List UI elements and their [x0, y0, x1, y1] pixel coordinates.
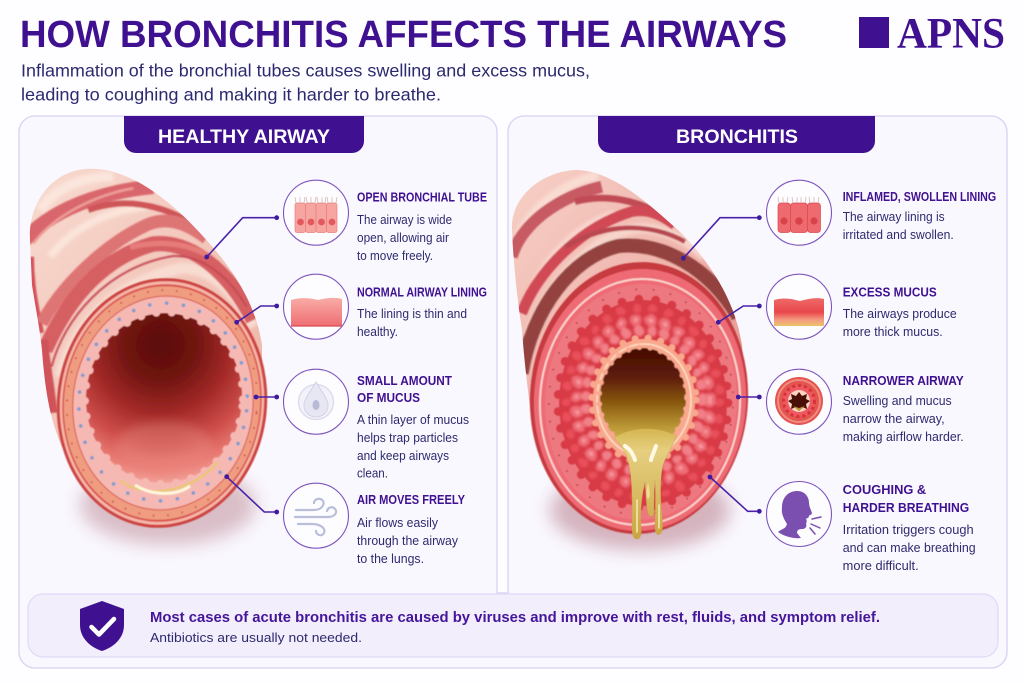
illustration: inflamed airway tube [505, 160, 765, 550]
item: open bronchial tube [284, 180, 487, 263]
text: coughing and harder breathing: and can make breathing [843, 541, 976, 555]
text: callout message: Antibiotics are usually not needed. [150, 630, 362, 645]
icon: swollen cells [766, 180, 832, 245]
connector lines: healthy airway [204, 215, 279, 514]
text: air moves freely: through the airway [357, 534, 459, 548]
heading tab: bronchitis [598, 116, 875, 153]
mucus drip [614, 429, 676, 539]
text: open bronchial tube: open, allowing air [357, 231, 449, 245]
text: excess mucus: more thick mucus. [843, 325, 943, 339]
text: inflamed, swollen lining: The airway lining is [843, 210, 945, 224]
icon: thick lining with mucus [766, 274, 832, 339]
text: coughing and harder breathing: COUGHING & [843, 482, 926, 497]
text: open bronchial tube: The airway is wide [357, 213, 452, 227]
text: open bronchial tube: OPEN BRONCHIAL TUBE [357, 190, 487, 204]
text: narrower airway: making airflow harder. [843, 430, 964, 444]
item: inflamed, swollen lining [766, 180, 996, 245]
text: inflamed, swollen lining [843, 189, 996, 242]
outer frame and panels [19, 116, 1007, 668]
item: air moves freely [284, 483, 465, 566]
heading tab: healthy airway: HEALTHY AIRWAY [158, 127, 330, 148]
text: coughing and harder breathing: Irritation triggers cough [843, 523, 974, 537]
front face of healthy tube [45, 268, 279, 538]
text: air moves freely: AIR MOVES FREELY [357, 492, 465, 507]
text: normal airway lining [357, 284, 487, 339]
text: small amount of mucus: helps trap particles [357, 431, 458, 445]
text: inflamed, swollen lining: INFLAMED, SWOLLEN LINING [843, 189, 996, 204]
text: narrower airway: NARROWER AIRWAY [843, 373, 964, 388]
icon: lining tissue [284, 274, 348, 339]
item: excess mucus [766, 274, 957, 339]
icon: wind [284, 483, 348, 548]
panel: bronchitis [505, 116, 996, 573]
text: small amount of mucus: clean. [357, 466, 388, 480]
connector lines: bronchitis [681, 215, 762, 514]
logo: APNS: APNS [897, 10, 1005, 58]
text: small amount of mucus: SMALL AMOUNT [357, 373, 452, 388]
icon: shield with check [80, 601, 124, 651]
text: open bronchial tube [357, 190, 487, 263]
text: callout message [150, 609, 880, 645]
text: normal airway lining: healthy. [357, 325, 398, 339]
text: narrower airway [843, 373, 964, 444]
text: coughing and harder breathing: more difficult. [843, 559, 919, 573]
text: air moves freely [357, 492, 465, 566]
item: coughing and harder breathing [766, 482, 976, 573]
item: normal airway lining [284, 274, 487, 339]
text: normal airway lining: The lining is thin and [357, 307, 467, 321]
front face of inflamed tube [523, 256, 755, 540]
text: small amount of mucus: and keep airways [357, 449, 449, 463]
icon: narrowed airway cross-section [766, 369, 832, 434]
callout: antibiotics note [28, 594, 998, 657]
heading tab: healthy airway [124, 116, 364, 153]
text: excess mucus: The airways produce [843, 307, 957, 321]
text: coughing and harder breathing: HARDER BREATHING [843, 500, 969, 515]
text: callout message: Most cases of acute bronchitis are caused by viruses and improve with rest, fluids, and symptom relief. [150, 609, 880, 626]
item: small amount of mucus [284, 369, 469, 480]
text: small amount of mucus [357, 373, 469, 480]
illustration: healthy airway tube [17, 160, 280, 545]
icon: epithelial cells [284, 180, 348, 245]
panel: healthy airway [17, 116, 487, 566]
text: coughing and harder breathing [843, 482, 976, 573]
text: narrower airway: Swelling and mucus [843, 394, 952, 408]
title: HOW BRONCHITIS AFFECTS THE AIRWAYS [20, 14, 787, 56]
subtitle [21, 60, 590, 104]
text: air moves freely: Air flows easily [357, 516, 439, 530]
subtitle: leading to coughing and making it harder to breathe. [21, 84, 441, 104]
text: narrower airway: narrow the airway, [843, 412, 945, 426]
text: excess mucus [843, 284, 957, 339]
text: small amount of mucus: A thin layer of mucus [357, 413, 469, 427]
icon: mucus droplet [284, 369, 348, 434]
text: small amount of mucus: OF MUCUS [357, 390, 420, 405]
text: inflamed, swollen lining: irritated and swollen. [843, 228, 954, 242]
icon: coughing head [766, 482, 832, 546]
subtitle: Inflammation of the bronchial tubes causes swelling and excess mucus, [21, 60, 590, 80]
text: excess mucus: EXCESS MUCUS [843, 284, 937, 300]
item: narrower airway [766, 369, 964, 444]
text: open bronchial tube: to move freely. [357, 249, 433, 263]
heading tab: bronchitis: BRONCHITIS [676, 127, 798, 148]
text: air moves freely: to the lungs. [357, 552, 424, 566]
text: normal airway lining: NORMAL AIRWAY LINING [357, 284, 487, 300]
